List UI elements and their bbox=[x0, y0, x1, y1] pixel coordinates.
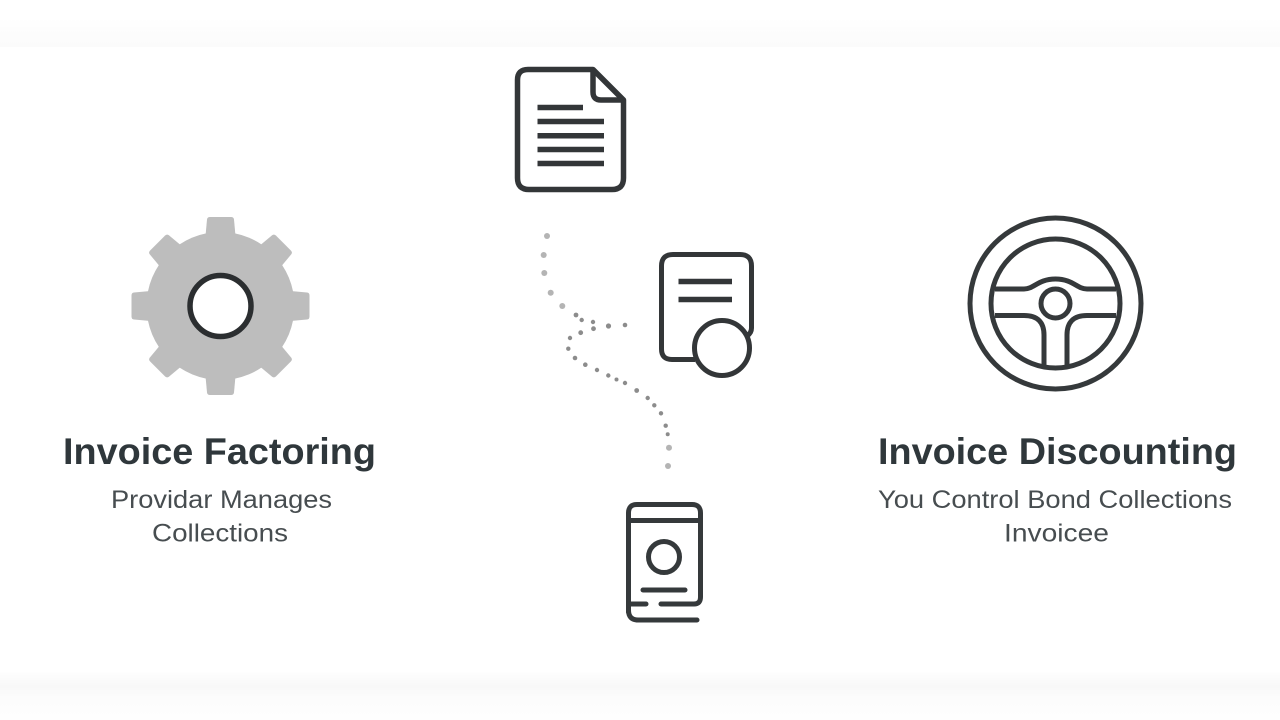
icon: document with circle badge bbox=[662, 254, 752, 376]
text: Provider manages collections: Providar Manages bbox=[111, 486, 332, 514]
heading: Invoice Factoring: Invoice Factoring bbox=[63, 431, 376, 472]
text: You control collections bbox=[878, 486, 1232, 548]
heading: Invoice Discounting: Invoice Discounting bbox=[878, 431, 1237, 472]
text: Provider manages collections: Collections bbox=[152, 520, 288, 548]
icon: document with folded corner bbox=[518, 70, 624, 190]
text: Provider manages collections bbox=[111, 486, 332, 548]
icon: mobile phone bbox=[628, 504, 700, 620]
icon: steering wheel bbox=[970, 218, 1141, 389]
icon: gear (Invoice Factoring) bbox=[132, 217, 310, 395]
text: You control collections: You Control Bond Collections bbox=[878, 486, 1232, 514]
text: You control collections: Invoicee bbox=[1004, 520, 1109, 548]
connector: dotted path bbox=[541, 233, 672, 469]
